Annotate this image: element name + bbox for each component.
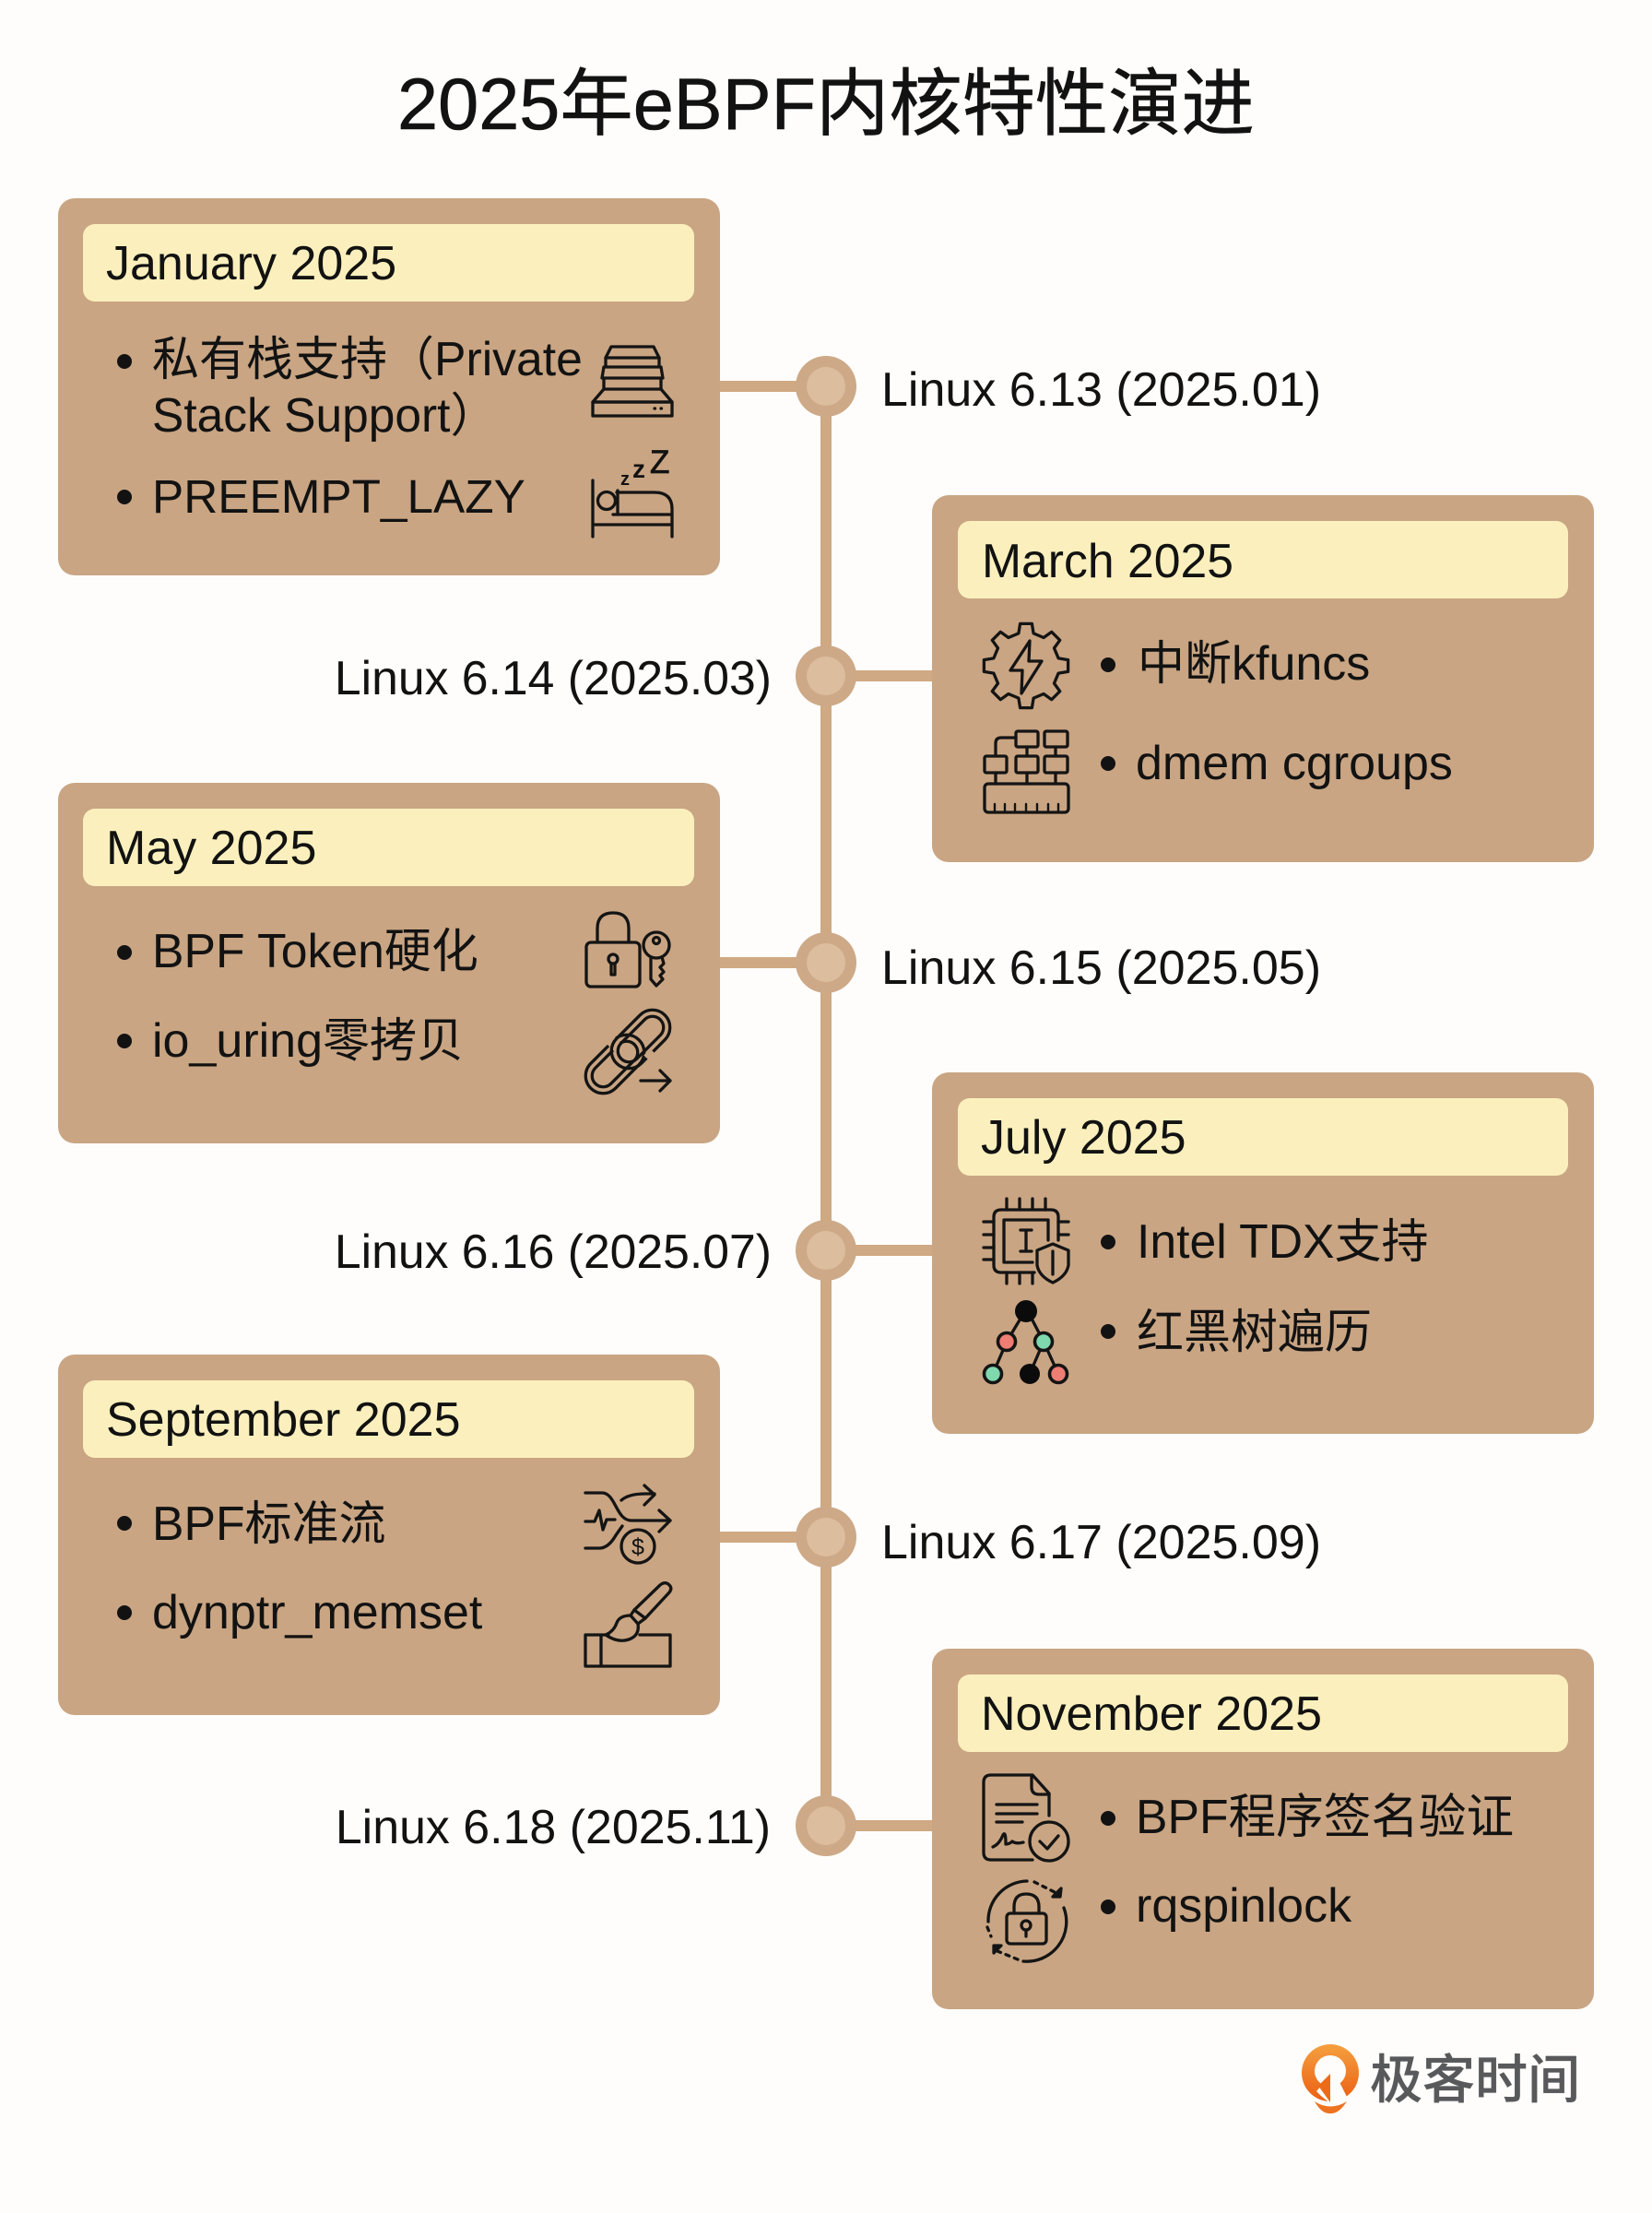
heading: May 2025: May 2025 <box>106 822 316 875</box>
node: Linux 6.13 <box>796 356 856 417</box>
icon: sleeping bed <box>593 444 672 537</box>
icon: cgroup tree <box>985 731 1068 812</box>
version label 6.17: Linux 6.17 (2025.09) <box>881 1516 1321 1569</box>
title: 2025年eBPF内核特性演进 <box>397 63 1255 145</box>
heading: January 2025: January 2025 <box>106 237 396 290</box>
timeline axis <box>719 381 933 1831</box>
version label 6.14: Linux 6.14 (2025.03) <box>335 651 772 704</box>
bullet: PREEMPT_LAZY: PREEMPT_LAZY <box>152 470 525 523</box>
icon: stream flow: $ <box>631 1534 644 1560</box>
icon: sleeping bed: z <box>632 455 645 483</box>
heading: March 2025: March 2025 <box>982 534 1233 587</box>
icon: stack <box>593 347 672 416</box>
bullet: private stack: Stack Support） <box>152 388 498 442</box>
bullet: dmem cgroups: dmem cgroups <box>1136 737 1453 790</box>
icon: lock and key <box>586 913 669 987</box>
bullet: dynptr_memset: dynptr_memset <box>152 1586 483 1639</box>
node: Linux 6.18 <box>796 1795 856 1856</box>
node: Linux 6.14 <box>796 645 856 706</box>
bullet: BPF streams: BPF标准流 <box>152 1497 386 1550</box>
bullet: private stack: 私有栈支持（Private <box>152 332 583 385</box>
bullet: rbtree: 红黑树遍历 <box>1137 1306 1372 1358</box>
panel: September 2025 <box>58 1355 720 1715</box>
version label 6.18: Linux 6.18 (2025.11) <box>336 1800 771 1853</box>
icon: stream flow <box>585 1485 670 1563</box>
node: Linux 6.15 <box>796 932 856 993</box>
heading: July 2025: July 2025 <box>981 1111 1186 1165</box>
bullet: private stack <box>117 332 583 442</box>
version label 6.16: Linux 6.16 (2025.07) <box>335 1225 772 1278</box>
bullet: kfuncs: 中断kfuncs <box>1138 637 1370 691</box>
icon: signed document <box>984 1775 1068 1861</box>
bullet: rqspinlock: rqspinlock <box>1136 1879 1352 1933</box>
icon: chain links <box>578 1002 678 1101</box>
bullet: signature: BPF程序签名验证 <box>1136 1790 1514 1843</box>
bullet: BPF Token: BPF Token硬化 <box>152 924 478 977</box>
panel: November 2025 <box>932 1649 1594 2009</box>
icon: sleeping bed: z <box>620 469 630 490</box>
logo mark <box>1302 2044 1359 2113</box>
icon: paint brush <box>585 1583 671 1666</box>
logo: 极客时间 <box>1302 2038 1580 2113</box>
heading: November 2025: November 2025 <box>981 1687 1322 1741</box>
heading: September 2025: September 2025 <box>106 1393 461 1447</box>
panel: January 2025 <box>58 198 720 575</box>
icon: rotating lock <box>987 1881 1067 1961</box>
logo wordmark: 极客时间 <box>1370 2038 1580 2113</box>
bullet: Intel TDX: Intel TDX支持 <box>1137 1214 1429 1268</box>
panel: March 2025 <box>932 495 1594 862</box>
panel: May 2025 <box>58 783 720 1143</box>
icon: sleeping bed: Z <box>650 444 669 480</box>
panel: July 2025 <box>932 1072 1594 1434</box>
version label 6.15: Linux 6.15 (2025.05) <box>881 941 1321 995</box>
bullet: io_uring: io_uring零拷贝 <box>152 1014 464 1068</box>
icon: red-black tree <box>985 1300 1068 1384</box>
icon: chip shield <box>984 1199 1068 1284</box>
version label 6.13: Linux 6.13 (2025.01) <box>881 363 1321 417</box>
icon: gear bolt <box>984 623 1068 708</box>
node: Linux 6.16 <box>796 1220 856 1281</box>
node: Linux 6.17 <box>796 1507 856 1568</box>
